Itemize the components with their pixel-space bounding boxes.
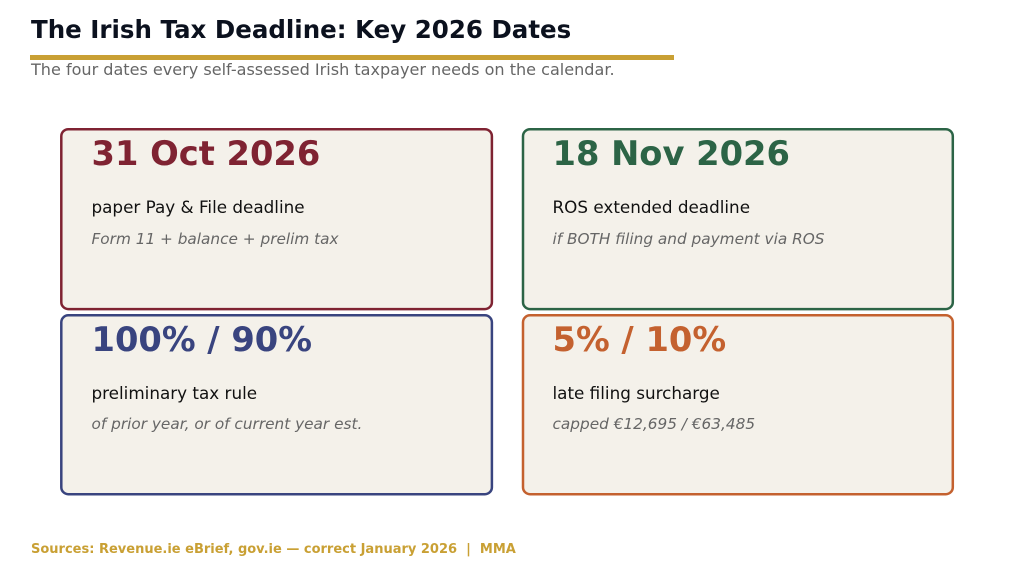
panel: 100% / 90%	[60, 314, 494, 496]
panel: 18 Nov 2026	[522, 128, 954, 310]
card background	[522, 128, 954, 310]
description: ROS extended deadline	[552, 197, 750, 217]
source footer: Sources: Revenue.ie eBrief, gov.ie — correct January 2026 | MMA	[31, 542, 516, 557]
card background	[60, 314, 494, 496]
date heading: 31 Oct 2026	[92, 134, 320, 173]
description: late filing surcharge	[552, 383, 720, 403]
note: Form 11 + balance + prelim tax	[92, 230, 339, 248]
note: of prior year, or of current year est.	[92, 415, 362, 433]
note: capped €12,695 / €63,485	[552, 415, 755, 433]
note: if BOTH filing and payment via ROS	[552, 230, 824, 248]
description: preliminary tax rule	[92, 383, 257, 403]
card background	[522, 314, 954, 496]
date heading: 18 Nov 2026	[552, 134, 790, 173]
title: The Irish Tax Deadline: Key 2026 Dates	[31, 15, 571, 44]
description: paper Pay & File deadline	[92, 197, 305, 217]
subtitle: The four dates every self-assessed Irish taxpayer needs on the calendar.	[31, 60, 615, 79]
card background	[60, 128, 494, 310]
panel: 31 Oct 2026	[60, 128, 494, 310]
title underline	[30, 55, 674, 60]
figure heading: 100% / 90%	[92, 320, 312, 359]
figure heading: 5% / 10%	[552, 320, 726, 359]
panel: 5% / 10%	[522, 314, 954, 496]
